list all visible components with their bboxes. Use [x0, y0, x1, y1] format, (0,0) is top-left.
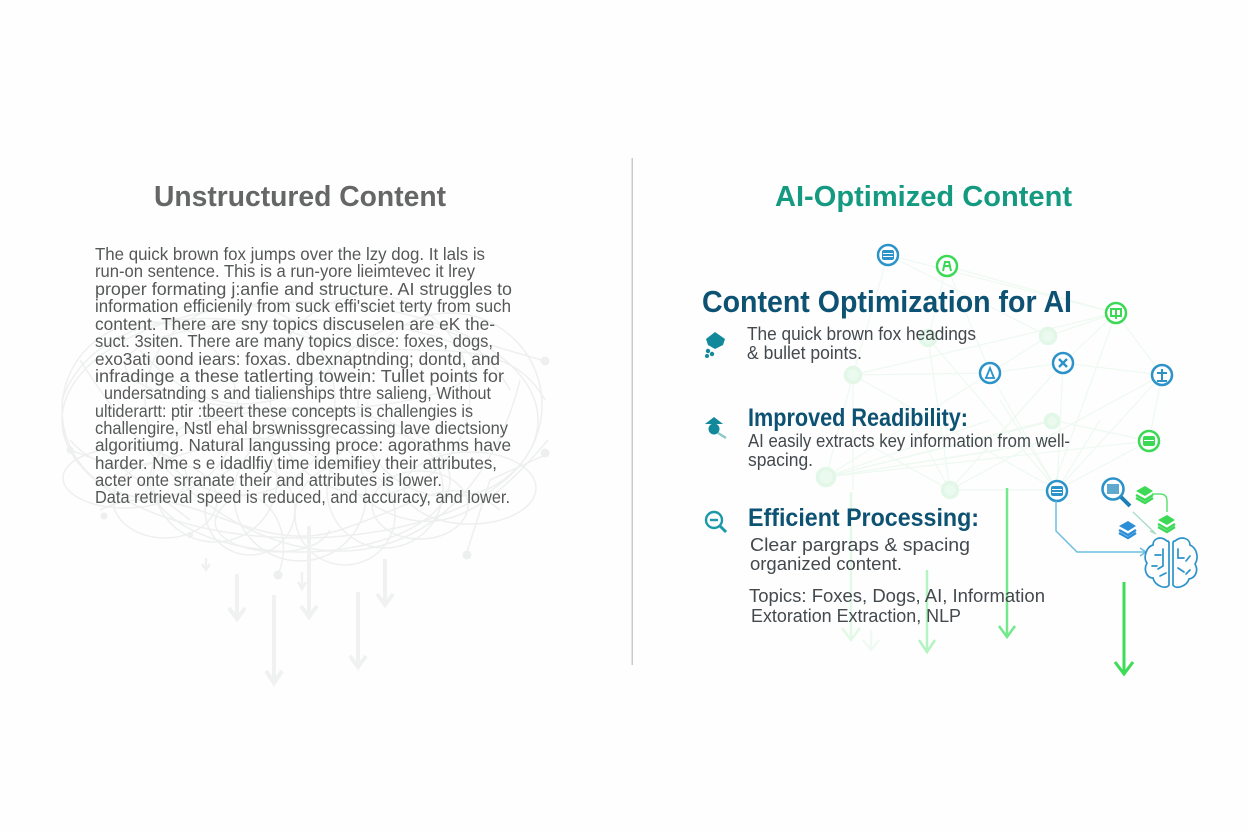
garbled paragraph: run-on sentence. This is a run-yore lieimtevec it lrey	[95, 261, 475, 281]
section: Improved Readibility: spacing.	[748, 449, 813, 470]
garbled paragraph: suct. 3siten. There are many topics disce: foxes, dogs,	[95, 331, 493, 351]
blue network nodes	[878, 245, 1172, 501]
garbled paragraph: undersatnding s and tialienships thtre salieng, Without	[104, 383, 491, 403]
network connections	[826, 255, 1162, 490]
heading: Unstructured Content: Unstructured Content	[154, 181, 446, 213]
garbled paragraph: challengire, Nstl ehal brswnissgrecassing lave diectsiony	[95, 418, 508, 438]
text: headings and bullet points: & bullet points.	[747, 342, 862, 363]
garbled paragraph: ultiderartt: ptir :tbeert these concepts is challengies is	[95, 401, 473, 421]
garbled paragraph: content. There are sny topics discuselen are eK the-	[95, 314, 495, 334]
section: Improved Readibility: AI easily extracts key information from well-	[748, 430, 1070, 451]
garbled paragraph: harder. Nme s e idadlfiy time idemifiey their attributes,	[95, 453, 497, 473]
icon: reader with magnifier	[705, 417, 726, 438]
section: Efficient Processing: Extoration Extraction, NLP	[751, 605, 961, 626]
garbled paragraph: The quick brown fox jumps over the lzy dog. It lals is	[95, 244, 485, 264]
icon: search magnifier	[706, 512, 726, 532]
section: Efficient Processing: Topics: Foxes, Dogs, AI, Information	[749, 585, 1045, 606]
icon: graduate with dots	[705, 332, 725, 358]
section: Improved Readibility: Improved Readibility:	[748, 404, 968, 432]
tangled scribble background	[62, 295, 548, 575]
flow into brain	[1056, 494, 1167, 556]
icon: brain	[1145, 538, 1197, 587]
faded network nodes	[818, 328, 1058, 498]
node glyphs	[882, 250, 1167, 496]
garbled paragraph: Data retrieval speed is reduced, and accuracy, and lower.	[95, 487, 510, 507]
heading: Content Optimization for AI: Content Optimization for AI	[702, 284, 1072, 319]
section: Efficient Processing: Efficient Processing:	[748, 504, 979, 532]
heading: AI-Optimized Content: AI-Optimized Content	[775, 181, 1072, 213]
scribble nodes	[66, 356, 550, 580]
faded down arrows	[202, 526, 393, 683]
garbled paragraph: proper formating j:anfie and structure. AI struggles to	[95, 279, 512, 299]
green down arrows	[842, 488, 1133, 674]
divider	[632, 158, 633, 665]
section: Efficient Processing	[748, 504, 1045, 626]
section: Improved Readibility	[748, 404, 1070, 470]
garbled paragraph: information efficienily from suck effi'sciet terty from such	[95, 296, 511, 316]
garbled paragraph: acter onte srranate their and attributes is lower.	[95, 470, 442, 490]
panel: AI-optimized content	[702, 181, 1197, 674]
section: Efficient Processing: organized content.	[750, 553, 902, 574]
icon: magnifier	[1102, 478, 1130, 506]
icon: data stacks	[1119, 486, 1175, 538]
green network nodes	[937, 256, 1159, 451]
section: Efficient Processing: Clear pargraps & spacing	[750, 534, 970, 555]
text: headings and bullet points: The quick brown fox headings	[747, 323, 976, 344]
garbled paragraph: exo3ati oond iears: foxas. dbexnaptnding; dontd, and	[95, 349, 500, 369]
text: headings and bullet points	[747, 323, 976, 363]
garbled paragraph	[95, 244, 512, 507]
garbled paragraph: algoritiumg. Natural langussing proce: agorathms have	[95, 435, 511, 455]
garbled paragraph: infradinge a these tatlerting towein: Tullet points for	[95, 366, 504, 386]
panel: unstructured content	[62, 181, 550, 683]
